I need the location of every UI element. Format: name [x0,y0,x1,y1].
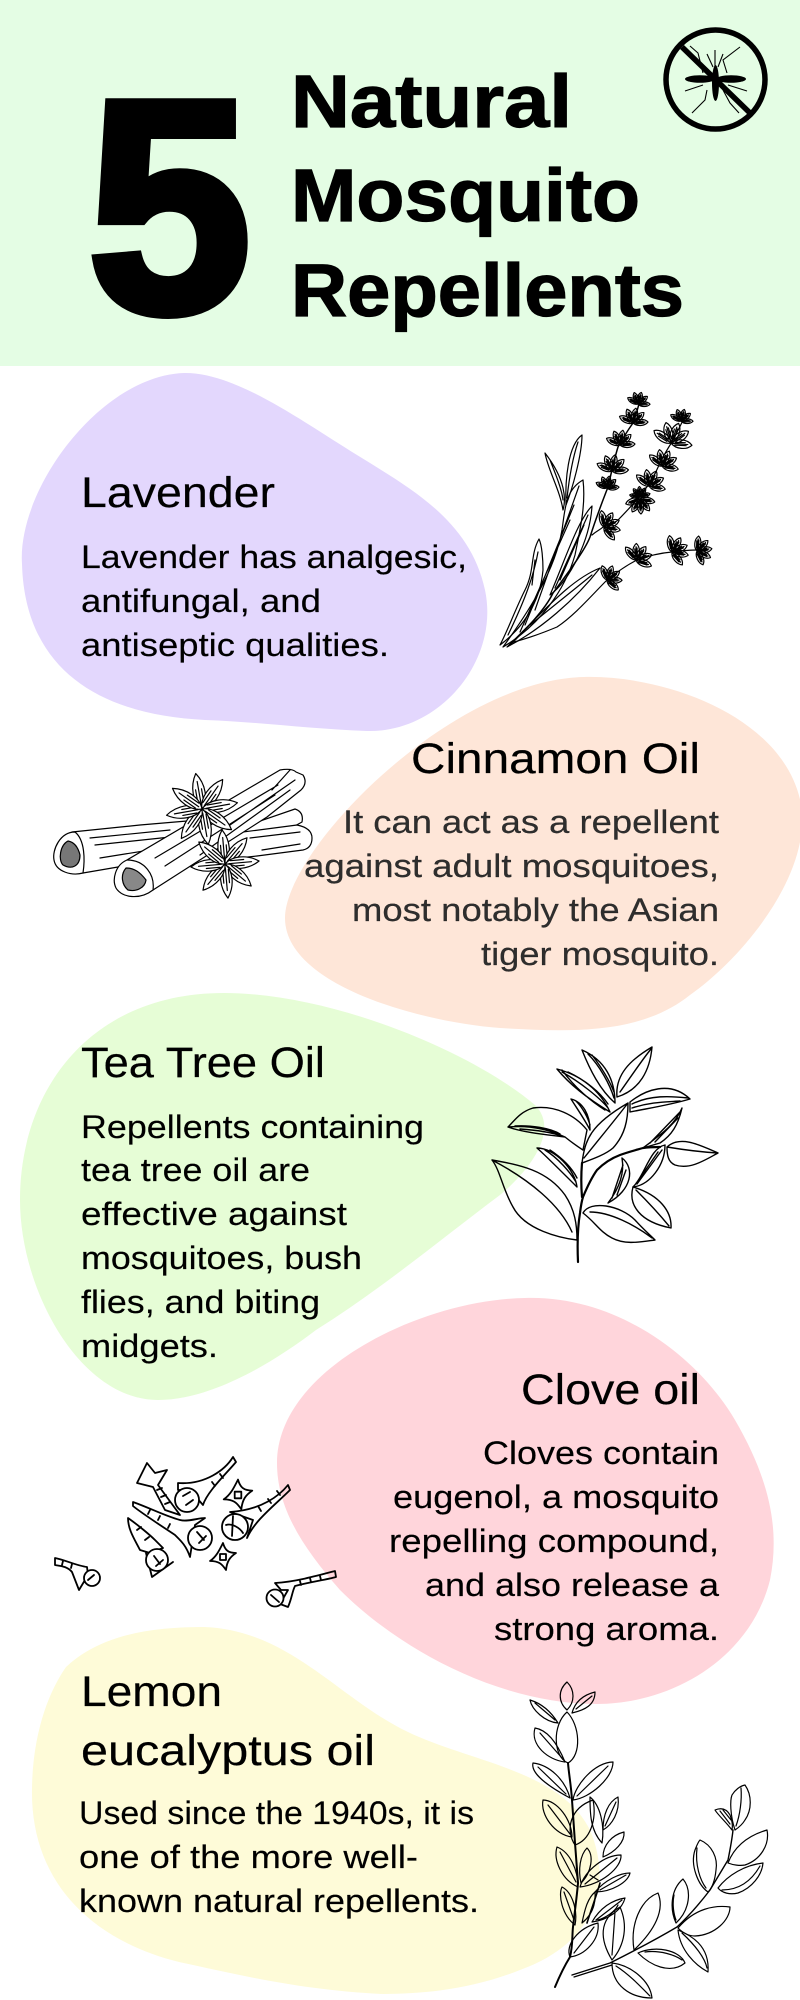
body text: and also release a [425,1567,719,1603]
title: Mosquito [291,154,640,237]
body text: known natural repellents. [79,1883,479,1919]
body text [81,1109,424,1364]
body text: tiger mosquito. [481,936,719,972]
body text: flies, and biting [81,1284,320,1320]
body text: Lavender has analgesic, [81,539,467,575]
body text: antifungal, and [81,583,321,619]
body text: Cloves contain [483,1435,719,1471]
blob: green [20,993,544,1400]
title [291,60,684,332]
blob: pink [277,1298,774,1704]
blob: yellow [32,1627,599,1994]
header band [0,0,800,375]
body text: mosquitoes, bush [81,1240,362,1276]
body text: Repellents containing [81,1109,424,1145]
heading: Lemon [81,1668,222,1716]
body text: repelling compound, [389,1523,719,1559]
heading [81,1668,375,1775]
body text [79,1795,479,1919]
blob: lavender [22,373,487,731]
body text: most notably the Asian [352,892,719,928]
body text [304,804,719,972]
illustration: cloves [55,1457,336,1607]
illustration: eucalyptus branches [530,1682,768,1998]
panel: cinnamon oil [54,677,800,1030]
body text: midgets. [81,1328,218,1364]
body text: against adult mosquitoes, [304,848,719,884]
panel: tea tree oil [20,993,718,1400]
body text: strong aroma. [494,1611,719,1647]
title: Repellents [291,249,684,332]
illustration: lavender sprig [500,389,713,647]
panel: lemon eucalyptus oil [32,1627,768,1998]
illustration: cinnamon sticks and star anise [54,767,312,901]
body text [81,539,467,663]
body text: tea tree oil are [81,1152,310,1188]
blob: peach [285,677,800,1030]
body text: It can act as a repellent [343,804,719,840]
title: Natural [291,60,572,143]
panel: lavender [22,373,713,731]
body text: Used since the 1940s, it is [79,1795,474,1831]
heading: Clove oil [521,1366,700,1414]
body text: eugenol, a mosquito [393,1479,719,1515]
body text: effective against [81,1196,347,1232]
illustration: tea tree branch [492,1047,718,1262]
big numeral 5: 5 [88,38,251,375]
body text: one of the more well- [79,1839,418,1875]
icon: crossed-out mosquito [666,30,765,129]
body text [389,1435,719,1647]
heading: Lavender [81,469,275,517]
heading: Cinnamon Oil [411,735,700,783]
heading: Tea Tree Oil [81,1039,325,1087]
body text: antiseptic qualities. [81,627,389,663]
panel: clove oil [55,1298,774,1704]
heading: eucalyptus oil [81,1727,375,1775]
